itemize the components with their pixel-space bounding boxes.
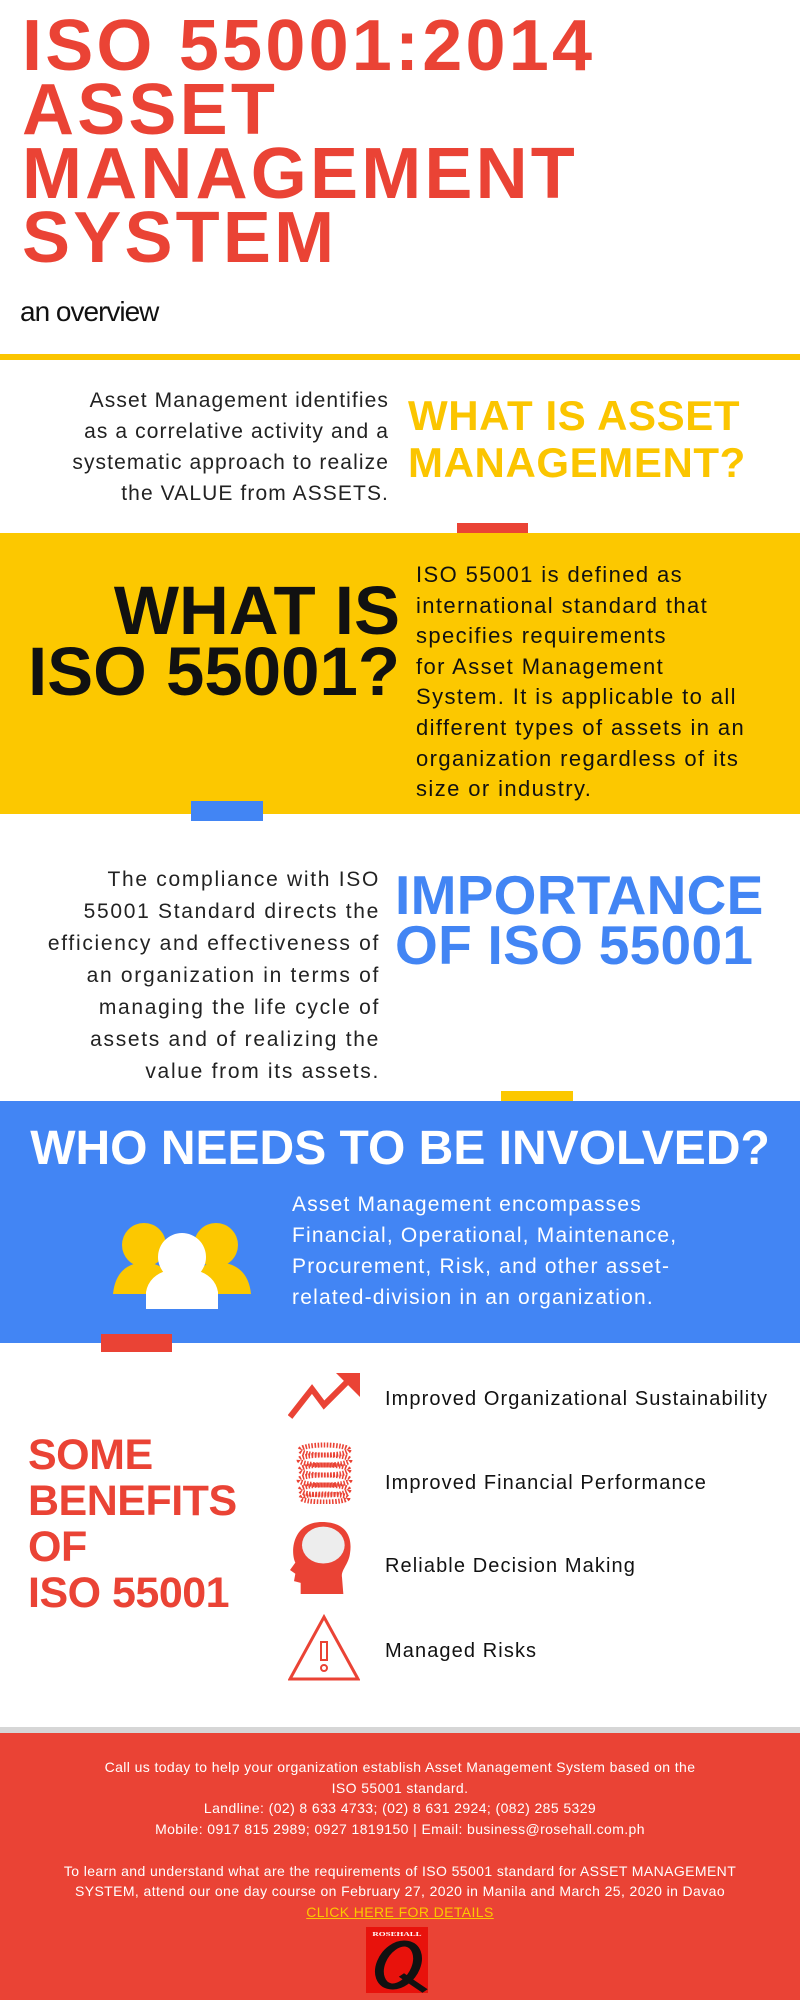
panel: footer [0,1733,800,2000]
text: compliance: an organization in terms of [87,964,380,987]
heading: what is asset management: WHAT IS ASSET [408,392,740,439]
text: contact: To learn and understand what are the requirements of ISO 55001 standard for ASSET MANAGEMENT [64,1863,736,1879]
text: asset management definition: Asset Management identifies [90,389,389,412]
text: contact: Mobile: 0917 815 2989; 0927 1819150 | Email: business@rosehall.com.ph [155,1821,645,1837]
text: asset management definition: as a correlative activity and a [84,420,389,443]
text: compliance: value from its assets. [145,1060,380,1083]
heading: some benefits: BENEFITS [28,1477,237,1525]
text: risks: Managed Risks [385,1640,537,1662]
text: compliance [48,868,380,1083]
text: asset management encompasses: related-division in an organization. [292,1286,654,1309]
heading: some benefits: ISO 55001 [28,1569,229,1617]
tab: red [457,523,528,543]
panel: importance [48,864,764,1083]
tab: red [101,1334,172,1352]
icon: warning [288,1614,360,1680]
icon: head [290,1522,351,1594]
text: contact: Call us today to help your organization establish Asset Management System based on the [105,1759,695,1775]
text: decision: Reliable Decision Making [385,1555,636,1577]
text: asset management encompasses [292,1193,677,1309]
subtitle: an overview [20,296,158,327]
text: contact: SYSTEM, attend our one day course on February 27, 2020 in Manila and March 25, 2020 in Davao [75,1883,725,1899]
text: asset management encompasses: Asset Management encompasses [292,1193,642,1216]
text: iso 55001 definition: international standard that [416,593,708,618]
title: ASSET [22,70,278,150]
text: asset management definition: the VALUE from ASSETS. [121,482,389,505]
text: asset management encompasses: Financial, Operational, Maintenance, [292,1224,677,1247]
text: iso 55001 definition: organization regardless of its [416,746,739,771]
text: iso 55001 definition: ISO 55001 is defined as [416,562,683,587]
panel: who needs to be involved [0,1101,800,1343]
text: asset management definition [72,389,389,505]
tab: yellow [501,1091,573,1110]
icon: rosehall logo [366,1927,428,1993]
text: asset management definition: systematic approach to realize [72,451,389,474]
heading: some benefits: OF [28,1523,87,1571]
heading: what is asset management [408,392,746,486]
heading: some benefits: SOME [28,1431,153,1479]
text: contact: ISO 55001 standard. [332,1780,468,1796]
benefit list [288,1373,768,1680]
heading: what is iso 55001 [28,572,400,710]
text: contact [64,1759,736,1920]
tab: blue [191,801,263,821]
text: compliance: assets and of realizing the [90,1028,380,1051]
icon: people [113,1223,251,1309]
title: SYSTEM [22,198,337,278]
text: compliance: efficiency and effectiveness of [48,932,380,955]
text: compliance: The compliance with ISO [107,868,380,891]
heading: importance of iso 55001: OF ISO 55001 [395,914,753,976]
panel: what is iso 55001 [0,533,800,814]
icon: coins [296,1442,352,1504]
text: financial: Improved Financial Performance [385,1472,707,1494]
heading: some benefits [28,1431,237,1617]
heading: what is iso 55001: ISO 55001? [28,633,400,710]
icon: trend arrow [288,1373,360,1419]
text: contact: Landline: (02) 8 633 4733; (02) 8 631 2924; (082) 285 5329 [204,1800,596,1816]
heading: who needs to be involved: WHO NEEDS TO BE INVOLVED? [30,1122,770,1175]
text: sustainability: Improved Organizational Sustainability [385,1388,768,1410]
heading: what is iso 55001: WHAT IS [114,572,400,649]
title: MANAGEMENT [22,134,578,214]
text: asset management encompasses: Procurement, Risk, and other asset- [292,1255,670,1278]
panel: what is asset management [72,389,746,505]
title: ISO 55001:2014 [22,6,595,86]
text: iso 55001 definition: for Asset Management [416,654,664,679]
text: iso 55001 definition: System. It is applicable to all [416,684,737,709]
text: iso 55001 definition: specifies requirements [416,623,667,648]
text: contact: CLICK HERE FOR DETAILS [306,1904,494,1920]
heading: importance of iso 55001 [395,864,764,976]
heading: what is asset management: MANAGEMENT? [408,439,746,486]
text: iso 55001 definition: size or industry. [416,776,592,801]
heading: importance of iso 55001: IMPORTANCE [395,864,764,926]
icon: rosehall logo: ROSEHALL [372,1930,422,1938]
text: compliance: managing the life cycle of [99,996,380,1019]
text: compliance: 55001 Standard directs the [84,900,380,923]
text: iso 55001 definition [416,562,745,801]
title [22,6,595,278]
text: iso 55001 definition: different types of assets in an [416,715,745,740]
